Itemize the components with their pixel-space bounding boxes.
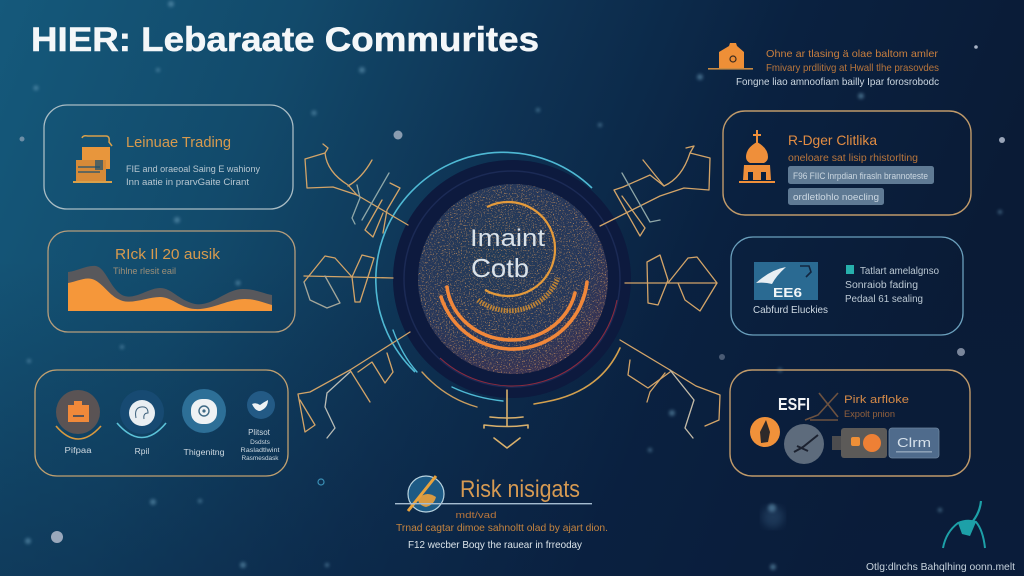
icon item 1: Pifpaa bbox=[64, 446, 92, 455]
title: HIER: Lebaraate Commurites bbox=[31, 21, 539, 59]
icon: note badge bbox=[708, 43, 753, 70]
tile: grey bbox=[832, 428, 887, 458]
logo text: ESFI bbox=[778, 394, 810, 414]
hub: cyan outer ring bbox=[376, 152, 592, 372]
footer note: Otlg:dlnchs Bahqlhing oonn.melt bbox=[866, 561, 1015, 573]
icon item 4: Plitsot bbox=[248, 428, 271, 437]
note text: Fmivary prdlitivg at Hwall tlhe prasovdes bbox=[766, 62, 939, 74]
icon item 4: Rasladtlwint bbox=[240, 447, 280, 454]
marker bbox=[846, 265, 854, 274]
subheading: Expolt pnion bbox=[844, 409, 895, 419]
text block: Tatlart amelalgnso bbox=[860, 266, 939, 277]
icon: grey circle bbox=[784, 424, 824, 464]
tag 1: F96 FIIC lnrpdian firasln brannoteste bbox=[793, 171, 928, 182]
text block: Sonraiob fading bbox=[845, 280, 918, 291]
subheading: oneloare sat lisip rhistorlting bbox=[788, 153, 918, 164]
note text: Fongne liao amnoofiam bailly Ipar forosrobodc bbox=[736, 76, 939, 88]
panel: esfi bbox=[730, 370, 970, 476]
text line orange: Trnad cagtar dimoe sahnoltt olad by ajart dion. bbox=[396, 522, 608, 534]
icon: risk badge bbox=[408, 476, 444, 512]
connector: top left bbox=[305, 144, 408, 237]
icon: teal figure bbox=[943, 501, 985, 548]
tag 2 bbox=[788, 188, 884, 205]
icon: faint sketch bbox=[805, 393, 838, 420]
logo: EE6 bbox=[773, 286, 802, 300]
panel: ridger clitlika bbox=[723, 111, 971, 215]
note text bbox=[736, 48, 939, 88]
text block: Pedaal 61 sealing bbox=[845, 294, 923, 305]
hub: lower orange arcs bbox=[441, 282, 587, 349]
panel: leverage trading bbox=[44, 105, 293, 209]
subheading: mdt/vad bbox=[456, 510, 496, 520]
text block bbox=[845, 266, 939, 305]
text block bbox=[126, 164, 260, 188]
risk section bbox=[395, 476, 608, 551]
divider line bbox=[395, 503, 592, 504]
connector: top right bbox=[600, 146, 710, 236]
heading: R-Dger Clitlika bbox=[788, 132, 877, 148]
heading: Leinuae Trading bbox=[126, 135, 231, 151]
logo caption: Cabfurd Eluckies bbox=[753, 304, 828, 316]
hub: label: Cotb bbox=[471, 253, 529, 283]
icon item 4 bbox=[240, 391, 280, 462]
text line white: F12 wecber Boqy the rauear in frreoday bbox=[408, 539, 583, 551]
hub: speckled core bbox=[418, 184, 608, 374]
hub: dotted band bbox=[478, 278, 558, 311]
icon item 2 bbox=[117, 390, 166, 456]
connector: middle left bbox=[304, 255, 393, 308]
icon item 2: Rpil bbox=[135, 446, 149, 456]
top right note bbox=[708, 43, 939, 88]
logo bbox=[754, 262, 818, 300]
heading: Pirk arfloke bbox=[844, 394, 909, 406]
heading: Risk nisigats bbox=[460, 476, 580, 503]
central hub bbox=[376, 152, 631, 398]
icon item 1 bbox=[56, 390, 101, 455]
icon item 3 bbox=[182, 389, 226, 457]
panel: eeb logo bbox=[731, 237, 963, 335]
hub: dark disk bbox=[393, 160, 631, 398]
subheading: Tihlne rlesit eail bbox=[113, 266, 176, 276]
connector: lower arcs bbox=[393, 330, 620, 407]
icon item 4: Dsdsts bbox=[250, 439, 271, 446]
hub: label: Imaint bbox=[470, 225, 545, 252]
panel: risk chart bbox=[48, 231, 295, 332]
note text: Ohne ar tlasing ä olae baltom amler bbox=[766, 48, 939, 60]
connector: middle right bbox=[625, 255, 717, 311]
icon: trading machine bbox=[73, 136, 112, 183]
text block: FIE and oraeoal Saing E wahiony bbox=[126, 164, 260, 175]
hub: upper orange ring bbox=[485, 202, 555, 296]
hub: label bbox=[470, 225, 545, 283]
heading: RIck Il 20 ausik bbox=[115, 247, 221, 263]
tile: blue: Clrm bbox=[897, 435, 931, 450]
icon item 4: Rasmesdask bbox=[242, 455, 279, 462]
area chart bbox=[68, 266, 272, 311]
tile: blue bbox=[889, 428, 939, 458]
text block: Inn aatie in prarvGaite Cirant bbox=[126, 177, 249, 188]
connector: bottom left bbox=[298, 332, 410, 438]
panel: icon row bbox=[35, 370, 288, 476]
icon item 3: Thigenitng bbox=[184, 447, 225, 457]
icon: temple bbox=[739, 130, 775, 183]
connector: bottom right bbox=[620, 340, 720, 438]
arrow: bottom centre bbox=[484, 390, 528, 448]
tag 2: ordletlohlo noecling bbox=[793, 192, 879, 203]
icon: orange circle bbox=[750, 417, 780, 447]
tag 1 bbox=[788, 166, 934, 184]
